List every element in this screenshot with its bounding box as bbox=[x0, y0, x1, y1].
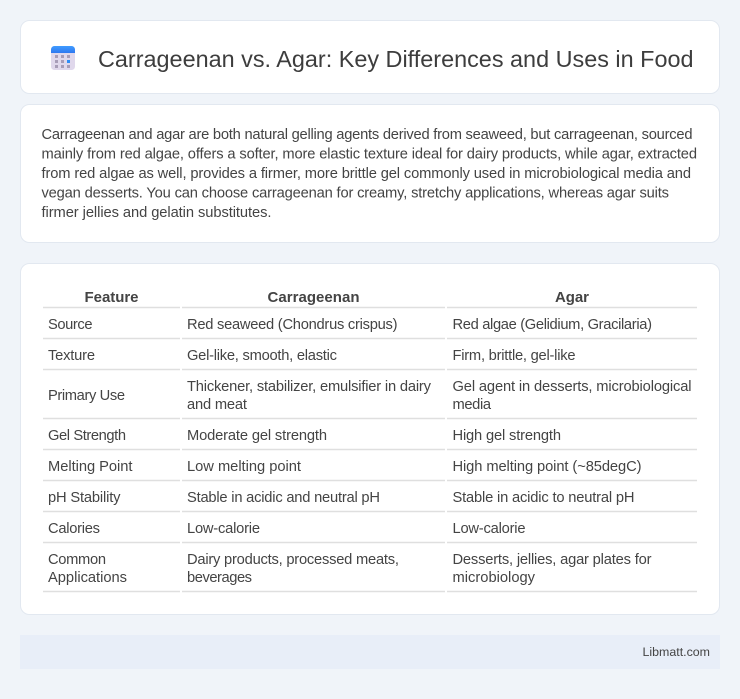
table header bbox=[84, 289, 589, 306]
row: calories: Calories bbox=[48, 521, 100, 537]
row: pH stability: pH Stability bbox=[48, 490, 121, 506]
row: source bbox=[48, 317, 652, 333]
row: primary use: media bbox=[452, 397, 492, 413]
row: primary use bbox=[48, 379, 692, 413]
row: calories: Low-calorie bbox=[187, 521, 260, 537]
table header: Feature bbox=[84, 289, 138, 306]
row: common applications: Dairy products, processed meats, bbox=[187, 552, 399, 568]
row: primary use: Gel agent in desserts, microbiological bbox=[452, 379, 692, 395]
row: texture: Gel-like, smooth, elastic bbox=[187, 348, 337, 364]
row: calories: Low-calorie bbox=[452, 521, 526, 537]
table header: Agar bbox=[555, 289, 589, 306]
row: gel strength: Moderate gel strength bbox=[187, 428, 327, 444]
row: pH stability bbox=[48, 490, 634, 506]
row: primary use: Thickener, stabilizer, emulsifier in dairy bbox=[187, 379, 432, 395]
title: Carrageenan vs. Agar: Key Differences and Uses in Food bbox=[98, 46, 694, 72]
row: gel strength bbox=[48, 428, 561, 444]
row: melting point bbox=[48, 459, 642, 475]
table row lines bbox=[43, 308, 697, 592]
intro text: Carrageenan and agar are both natural gelling agents derived from seaweed, but carrageenan, sourced bbox=[42, 127, 692, 143]
row: primary use: Primary Use bbox=[48, 388, 125, 404]
row: gel strength: Gel Strength bbox=[48, 428, 126, 444]
row: melting point: Melting Point bbox=[48, 459, 132, 475]
row: calories bbox=[48, 521, 526, 537]
footer bbox=[20, 635, 720, 669]
intro text: firmer jellies and gelatin substitutes. bbox=[42, 205, 272, 221]
row: melting point: Low melting point bbox=[187, 459, 301, 475]
row: common applications: microbiology bbox=[452, 570, 536, 586]
intro text bbox=[42, 127, 697, 221]
footer: Libmatt.com bbox=[642, 645, 710, 659]
row: source: Red algae (Gelidium, Gracilaria) bbox=[452, 317, 652, 333]
intro text: vegan desserts. You can choose carrageenan for creamy, stretchy applications, whereas agar suits bbox=[42, 186, 669, 202]
row: texture: Firm, brittle, gel-like bbox=[452, 348, 576, 364]
table header: Carrageenan bbox=[268, 289, 360, 306]
row: common applications: Common bbox=[48, 552, 106, 568]
row: common applications: Applications bbox=[48, 570, 127, 586]
row: common applications: Desserts, jellies, agar plates for bbox=[452, 552, 652, 568]
row: gel strength: High gel strength bbox=[452, 428, 561, 444]
panel: header bbox=[20, 20, 720, 94]
row: texture: Texture bbox=[48, 348, 95, 364]
panel: introduction bbox=[20, 104, 720, 242]
row: common applications: beverages bbox=[187, 570, 252, 586]
row: pH stability: Stable in acidic to neutral pH bbox=[452, 490, 634, 506]
row: melting point: High melting point (~85degC) bbox=[452, 459, 642, 475]
row: primary use: and meat bbox=[187, 397, 247, 413]
icon: calendar bbox=[51, 46, 75, 70]
panel: comparison table bbox=[20, 264, 720, 614]
row: pH stability: Stable in acidic and neutral pH bbox=[187, 490, 380, 506]
intro text: from red algae as well, provides a firmer, more brittle gel commonly used in microbiological media and bbox=[42, 166, 691, 182]
row: source: Red seaweed (Chondrus crispus) bbox=[187, 317, 398, 333]
intro text: mainly from red algae, offers a softer, more elastic texture ideal for dairy products, while agar, extracted bbox=[42, 146, 697, 162]
row: texture bbox=[48, 348, 576, 364]
row: common applications bbox=[48, 552, 652, 586]
row: source: Source bbox=[48, 317, 92, 333]
